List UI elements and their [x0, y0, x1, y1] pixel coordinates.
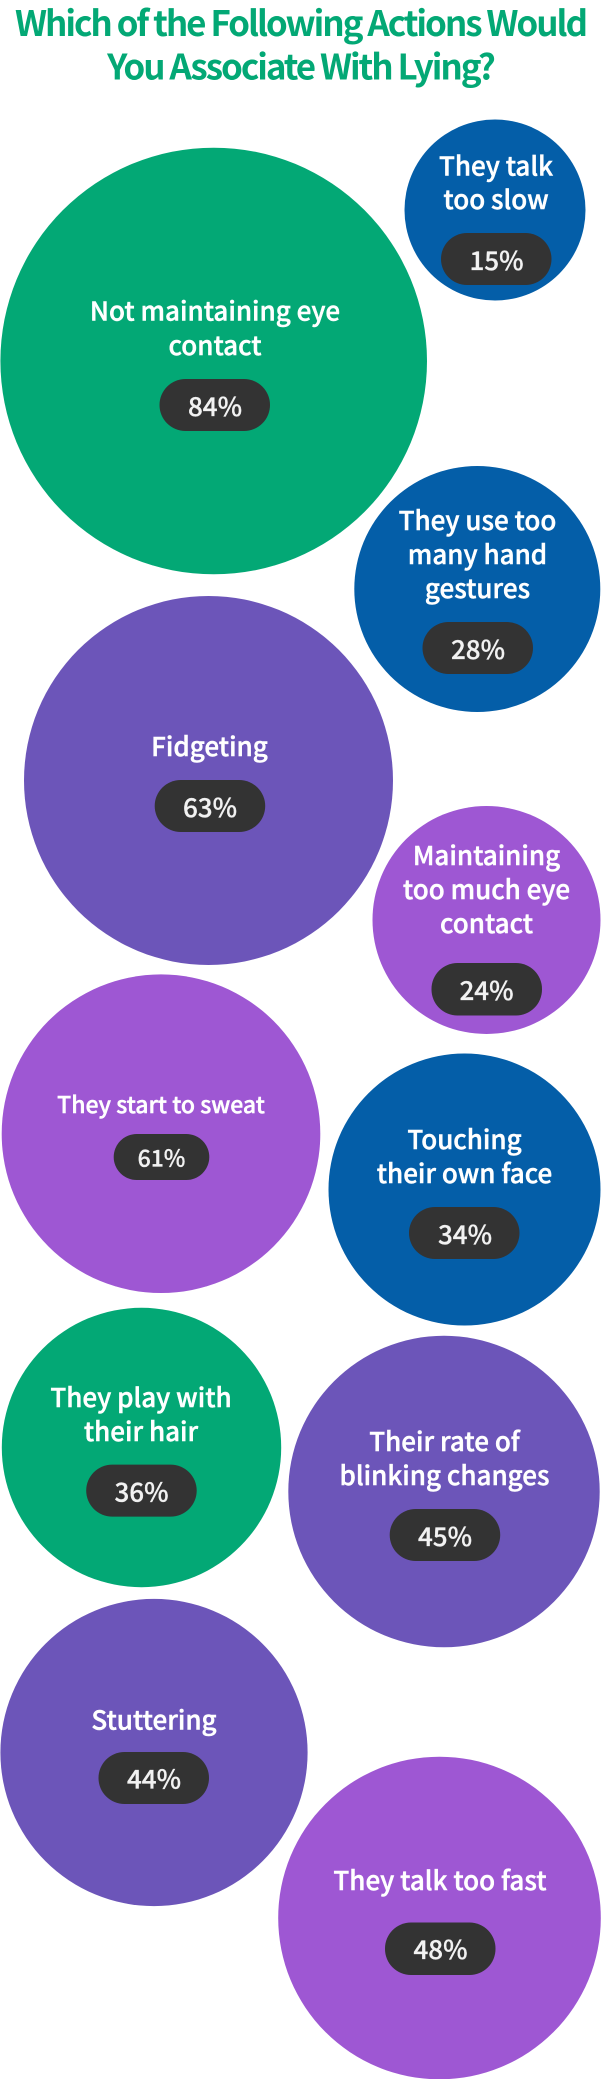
- bubble: they use too many hand gestures 28%: 28%: [451, 630, 505, 667]
- bubble: not maintaining eye contact 84%: Not maintaining eye: [90, 292, 340, 328]
- bubble: maintaining too much eye contact 24%: 24%: [459, 971, 514, 1008]
- title: [15, 0, 586, 90]
- bubble: maintaining too much eye contact 24%: [372, 806, 600, 1034]
- bubble: they talk too fast 48%: They talk too fast: [333, 1861, 547, 1898]
- bubble: they talk too fast 48%: 48%: [413, 1930, 468, 1967]
- bubble: they start to sweat 61%: [2, 974, 320, 1293]
- bubble: not maintaining eye contact 84%: [0, 148, 427, 574]
- bubble: they play with their hair 36%: their hair: [84, 1412, 199, 1449]
- bubble: they use too many hand gestures 28%: many hand: [408, 535, 547, 572]
- bubble: maintaining too much eye contact 24%: Maintaining: [413, 836, 560, 873]
- bubble: they talk too slow 15%: They talk: [439, 146, 553, 184]
- bubble: stuttering 44%: Stuttering: [91, 1700, 217, 1738]
- bubble: they play with their hair 36%: They play with: [50, 1378, 232, 1415]
- bubble: they talk too slow 15%: [404, 120, 586, 300]
- bubble: not maintaining eye contact 84%: contact: [168, 326, 262, 363]
- bubble: stuttering 44%: [0, 1599, 308, 1906]
- bubble: they use too many hand gestures 28%: They use too: [399, 501, 556, 538]
- bubble: they talk too fast 48%: [278, 1757, 601, 2079]
- bubble: not maintaining eye contact 84%: 84%: [188, 387, 242, 424]
- title: You Associate With Lying?: [106, 40, 495, 90]
- bubble: they talk too slow 15%: too slow: [443, 180, 549, 217]
- bubble: touching their own face 34%: 34%: [438, 1215, 492, 1252]
- bubble: they start to sweat 61%: 61%: [138, 1140, 185, 1174]
- bubble: they start to sweat 61%: They start to sweat: [57, 1086, 265, 1120]
- bubble: they play with their hair 36%: 36%: [114, 1472, 169, 1510]
- bubble: touching their own face 34%: their own face: [377, 1154, 552, 1191]
- bubble: their rate of blinking changes 45%: blinking changes: [340, 1456, 549, 1493]
- bubble: maintaining too much eye contact 24%: too much eye: [403, 870, 570, 907]
- bubble: stuttering 44%: 44%: [127, 1760, 181, 1796]
- bubble: fidgeting 63%: [24, 596, 393, 965]
- bubble: fidgeting 63%: 63%: [183, 788, 237, 825]
- bubble: maintaining too much eye contact 24%: contact: [440, 904, 533, 941]
- bubble: their rate of blinking changes 45%: [288, 1336, 600, 1647]
- bubble: they talk too slow 15%: 15%: [469, 241, 524, 278]
- bubble: they use too many hand gestures 28%: [354, 466, 600, 712]
- bubble: they use too many hand gestures 28%: gestures: [425, 569, 530, 606]
- bubble: touching their own face 34%: Touching: [407, 1120, 522, 1157]
- bubble: fidgeting 63%: Fidgeting: [151, 727, 268, 764]
- bubble: their rate of blinking changes 45%: 45%: [418, 1517, 472, 1554]
- bubble: touching their own face 34%: [328, 1054, 600, 1326]
- bubble: they play with their hair 36%: [2, 1308, 281, 1587]
- bubble: their rate of blinking changes 45%: Their rate of: [369, 1422, 521, 1459]
